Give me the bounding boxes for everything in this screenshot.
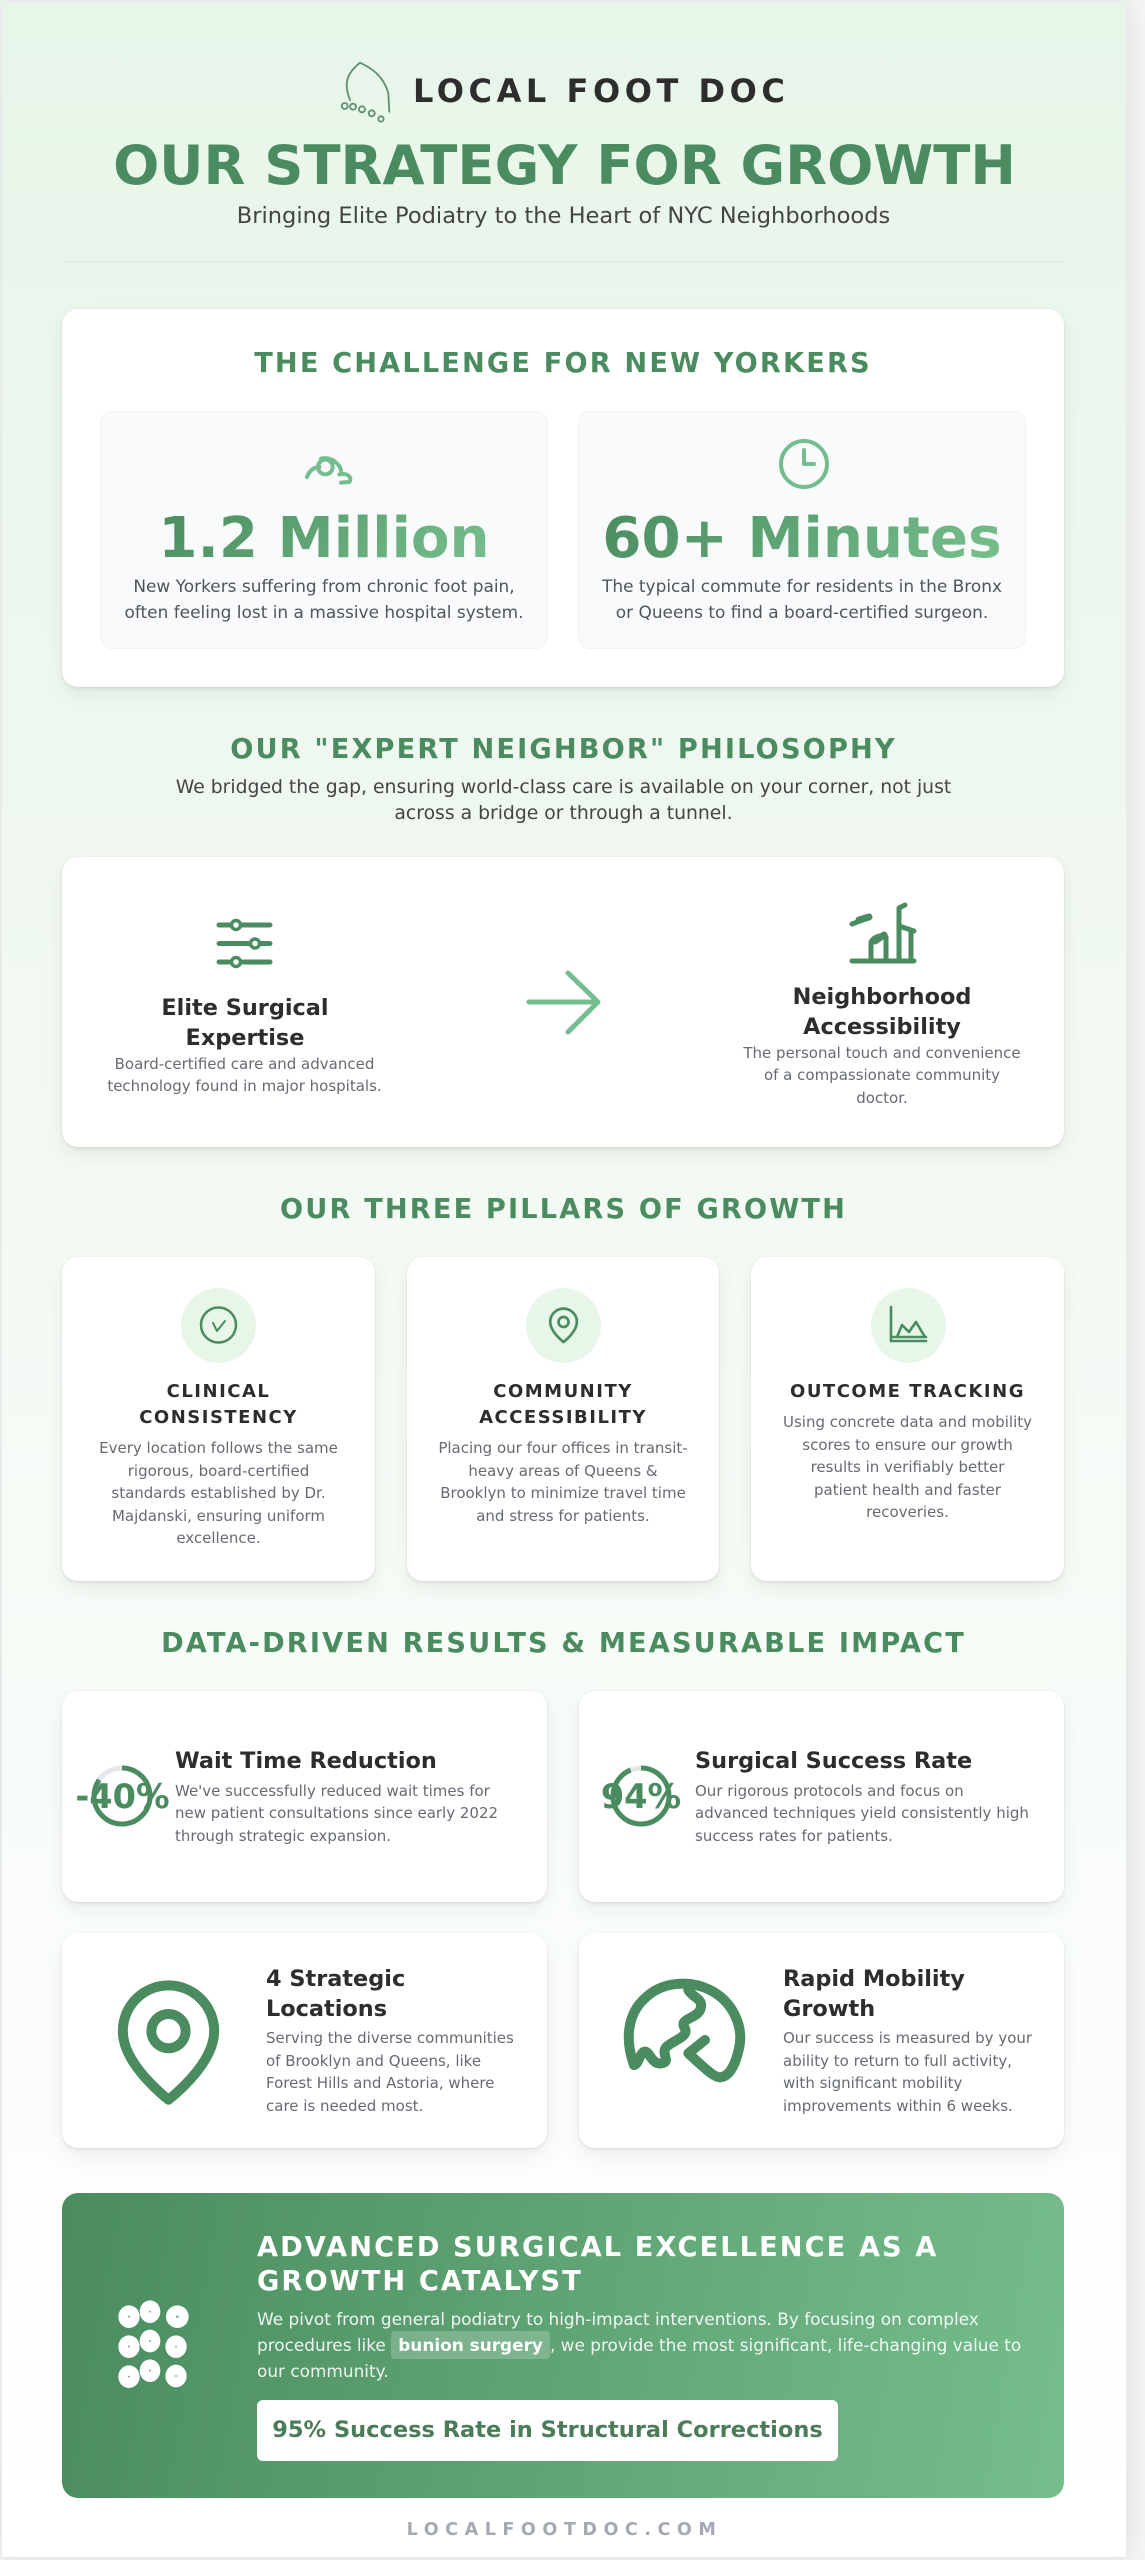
footer: LOCALFOOTDOC.COM [407,2520,722,2540]
pillar description: scores to ensure our growth [802,1436,1013,1454]
banner title: GROWTH CATALYST [257,2266,583,2297]
arrow [526,970,600,1034]
callout: 95% success rate [257,2400,838,2461]
block description: of a compassionate community [764,1066,1000,1084]
banner title [257,2232,938,2297]
metric title: Rapid Mobility [783,1966,965,1992]
pillar description: results in verifiably better [811,1458,1004,1476]
icon: area chart [871,1288,946,1363]
stat description: New Yorkers suffering from chronic foot pain, [133,576,515,596]
metric title [783,1966,965,2022]
philosophy intro text [176,777,951,824]
pillar description: Every location follows the same [99,1439,338,1457]
icon: large map pin [118,1980,220,2105]
block description [743,1044,1021,1106]
stat description [602,576,1002,622]
icon: foot logo [340,62,390,123]
stat value: 60+ Minutes [602,506,1002,571]
metric description: success rates for patients. [695,1826,893,1844]
brand name: LOCAL FOOT DOC [413,72,789,110]
panel: advanced surgical excellence banner [62,2193,1064,2498]
stat card: 1.2 million [100,411,548,649]
ring chart: -40% [75,1766,170,1826]
pillar title [139,1381,298,1428]
pillar description: standards established by Dr. [111,1484,326,1502]
metric description [695,1782,1029,1844]
pillar description: heavy areas of Queens & [468,1462,658,1480]
metric card: surgical success rate [579,1691,1064,1902]
ring chart: -40%: -40% [75,1777,170,1816]
icon: people [304,456,352,485]
icon: sliders [216,918,272,968]
metric description: We've successfully reduced wait times for [175,1782,490,1800]
banner title: ADVANCED SURGICAL EXCELLENCE AS A [257,2232,938,2263]
pillar title: ACCESSIBILITY [479,1407,647,1428]
metric card: 4 strategic locations [62,1933,547,2148]
pillar description [438,1439,688,1524]
icon: clock [779,439,829,489]
heading: three pillars: OUR THREE PILLARS OF GROWTH [280,1194,847,1225]
banner text [257,2308,1021,2380]
metric description: of Brooklyn and Queens, like [266,2052,481,2070]
stat description: or Queens to find a board-certified surgeon. [616,602,988,622]
block: neighborhood accessibility [743,902,1021,1106]
metric title: Growth [783,1996,875,2022]
block title: Accessibility [803,1014,961,1040]
metric description: Serving the diverse communities [266,2029,514,2047]
pillar: clinical consistency [62,1257,375,1581]
pillar description: patient health and faster [814,1480,1001,1498]
icon: neighborhood [850,902,916,964]
panel: philosophy transition [62,857,1064,1147]
title: OUR STRATEGY FOR GROWTH [113,134,1016,196]
block title: Elite Surgical [161,995,329,1021]
block title [161,995,329,1051]
heading: expert neighbor philosophy: OUR "EXPERT NEIGHBOR" PHILOSOPHY [230,734,897,764]
pillar description: rigorous, board-certified [128,1462,309,1480]
icon: mobility globe [624,1978,746,2082]
metric description [783,2029,1032,2114]
pillar: outcome tracking [751,1257,1064,1581]
metric description: new patient consultations since early 2022 [175,1804,498,1822]
metric description: advanced techniques yield consistently high [695,1804,1029,1822]
subtitle: Bringing Elite Podiatry to the Heart of NYC Neighborhoods [237,203,890,229]
metric title: 4 Strategic [266,1966,405,1992]
metric title: Wait Time Reduction [175,1748,437,1774]
pillar: community accessibility [407,1257,719,1581]
stat card: 60+ minutes [578,411,1026,649]
metric description: improvements within 6 weeks. [783,2096,1013,2114]
metric description: Our success is measured by your [783,2029,1032,2047]
icon: check circle [181,1288,256,1363]
panel: the challenge for new yorkers [62,309,1064,687]
metric description [175,1782,498,1844]
block: elite surgical expertise [107,918,382,1095]
header [62,62,1064,263]
stat description: The typical commute for residents in the Bronx [602,576,1002,596]
metric description: Our rigorous protocols and focus on [695,1782,964,1800]
pillar description: excellence. [176,1529,261,1547]
pillar description [783,1413,1032,1521]
metric description [266,2029,514,2114]
banner text: We pivot from general podiatry to high-impact interventions. By focusing on complex [257,2308,979,2328]
pillar description [99,1439,338,1547]
icon: toes dots [118,2300,189,2388]
pillar description: Using concrete data and mobility [783,1413,1032,1431]
pillar description: Placing our four offices in transit- [438,1439,688,1457]
block title: Expertise [186,1025,304,1051]
block title [793,984,971,1040]
stat value: 1.2 Million [158,506,490,571]
philosophy intro text: We bridged the gap, ensuring world-class care is available on your corner, not just [176,777,951,798]
pillar description: Brooklyn to minimize travel time [440,1484,686,1502]
metric description: through strategic expansion. [175,1826,391,1844]
metric title [266,1966,405,2022]
ring chart: 94%: 94% [601,1777,681,1816]
pillar title: CONSISTENCY [139,1407,298,1428]
metric description: care is needed most. [266,2096,423,2114]
banner text: our community. [257,2360,389,2380]
block description: technology found in major hospitals. [107,1077,382,1095]
stat description [125,576,523,622]
callout: 95% success rate: 95% Success Rate in Structural Corrections [272,2417,823,2443]
philosophy intro text: across a bridge or through a tunnel. [394,803,733,824]
metric description: Forest Hills and Astoria, where [266,2074,494,2092]
heading: challenge: THE CHALLENGE FOR NEW YORKERS [254,348,872,379]
metric title: Locations [266,1996,387,2022]
icon: map pin [526,1288,601,1363]
pillar title: COMMUNITY [493,1381,633,1402]
block description [107,1054,382,1095]
block description: doctor. [856,1088,908,1106]
pillar title: OUTCOME TRACKING [790,1381,1025,1402]
metric card: rapid mobility growth [579,1933,1064,2148]
pillar description: and stress for patients. [476,1506,650,1524]
metric card: wait time reduction [62,1691,547,1902]
pillar description: recoveries. [866,1503,949,1521]
pillar title [479,1381,647,1428]
block description: The personal touch and convenience [743,1044,1021,1062]
metric description: with significant mobility [783,2074,962,2092]
pillar description: Majdanski, ensuring uniform [112,1506,325,1524]
ring chart: 94% [601,1766,681,1826]
metric description: ability to return to full activity, [783,2052,1012,2070]
metric title: Surgical Success Rate [695,1748,972,1774]
banner text: procedures like bunion surgery , we provide the most significant, life-changing value to [257,2334,1021,2354]
pillar title: CLINICAL [167,1381,270,1402]
heading: data-driven results: DATA-DRIVEN RESULTS & MEASURABLE IMPACT [161,1628,966,1658]
block title: Neighborhood [793,984,971,1010]
stat description: often feeling lost in a massive hospital system. [125,602,523,622]
block description: Board-certified care and advanced [115,1054,374,1072]
